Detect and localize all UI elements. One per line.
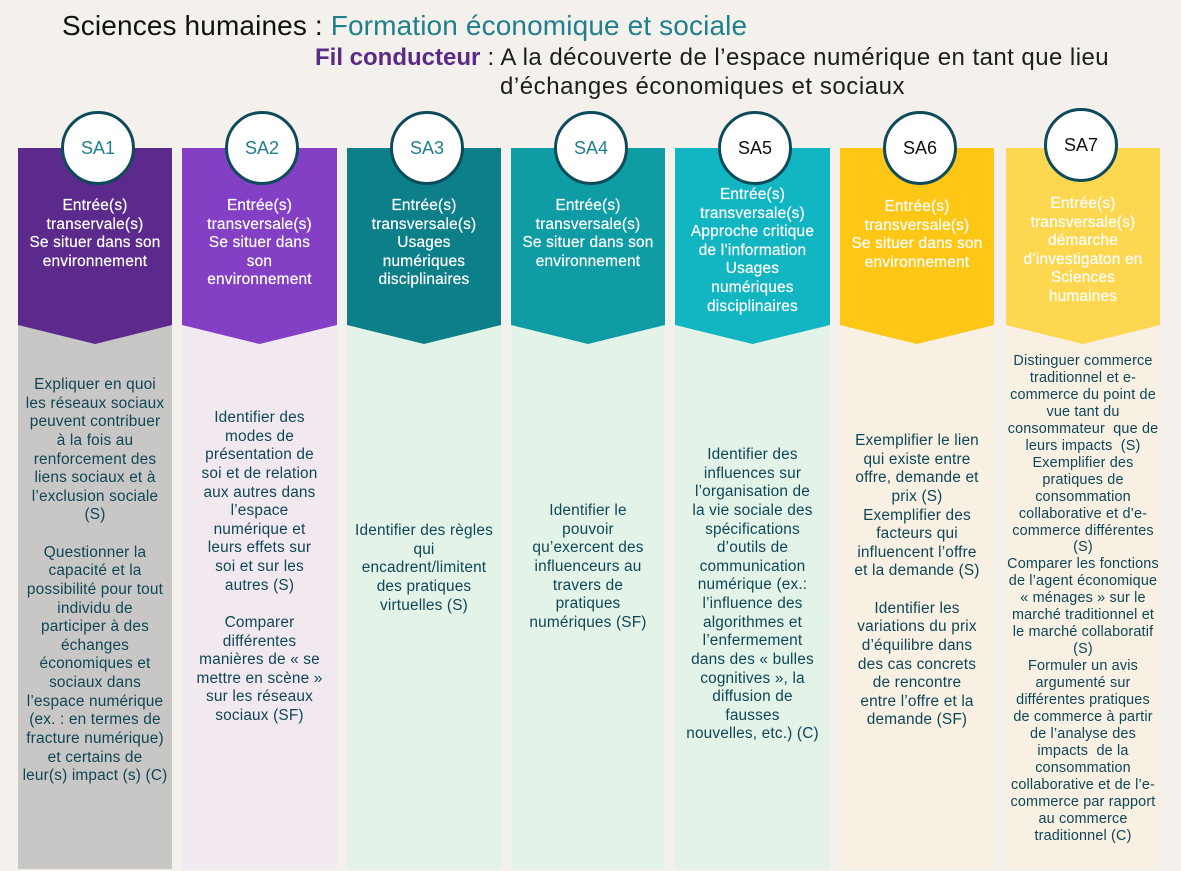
SA2 body background (182, 325, 337, 869)
SA3 body background (347, 325, 501, 869)
SA1 header text (29, 197, 161, 270)
SA7 body text: marché traditionnel et (1012, 607, 1154, 623)
SA2 body text: l’espace (231, 502, 288, 519)
subtitle: fil conducteur: Fil conducteur : A la découverte de l’espace numérique en tant que lieu (315, 44, 1109, 71)
SA7 body text: collaborative et de l’e- (1011, 777, 1155, 793)
SA1 body text: capacité et la (48, 562, 142, 579)
SA4 badge (554, 111, 628, 185)
SA4 header text: transversale(s) (536, 216, 640, 233)
SA3 body text: encadrent/limitent (362, 559, 486, 576)
SA7 body text: Comparer les fonctions (1007, 556, 1159, 572)
SA2 header text: son (247, 253, 272, 270)
SA3 header text (372, 197, 476, 288)
SA1 body text (23, 376, 167, 784)
panel: SA3 (347, 111, 501, 869)
SA1 body text: à la fois au (57, 432, 133, 449)
SA1 body text: renforcement des (34, 450, 156, 468)
SA6 body text: facteurs qui (876, 525, 958, 542)
SA1 body text: peuvent contribuer (30, 413, 160, 430)
SA6 badge: SA6 (903, 138, 937, 158)
SA4 header text (522, 197, 654, 270)
SA4 header banner (511, 148, 665, 344)
SA4 badge: SA4 (574, 138, 608, 158)
SA2 header text: Se situer dans (209, 234, 310, 251)
SA7 body text: (S) (1073, 641, 1093, 657)
SA6 header text: Entrée(s) (884, 198, 950, 215)
SA5 body text: l’organisation de (695, 483, 810, 500)
SA5 header text: Usages (726, 260, 779, 277)
SA7 header banner (1006, 148, 1160, 344)
SA5 body text: fausses (725, 707, 780, 724)
SA5 badge: SA5 (738, 138, 772, 158)
SA6 body text: et la demande (S) (854, 562, 980, 579)
SA5 body text: diffusion de (712, 688, 793, 705)
SA3 body text (355, 522, 493, 614)
SA5 body text: algorithmes et (703, 614, 802, 631)
SA7 body text: Exemplifier des (1033, 455, 1133, 471)
SA2 body text: aux autres dans (203, 484, 316, 500)
SA5 body background (675, 325, 830, 869)
SA7 header text: Entrée(s) (1050, 195, 1116, 212)
SA3 body text: des pratiques (377, 578, 471, 595)
SA6 body text: demande (SF) (867, 711, 967, 728)
SA6 body text: Exemplifier des (863, 506, 971, 524)
SA2 body text: mettre en scène » (196, 670, 323, 687)
SA6 header text (851, 198, 983, 271)
SA4 body text: travers de (553, 576, 623, 594)
SA1 body text: et certains de (48, 748, 142, 766)
panel: SA6 (840, 111, 994, 869)
SA4 header text: environnement (536, 253, 640, 270)
SA1 body text: liens sociaux et à (34, 469, 156, 486)
SA3 header banner (347, 148, 501, 344)
SA3 badge: SA3 (410, 138, 444, 158)
SA7 body background (1006, 325, 1160, 869)
SA5 body text: spécifications (705, 520, 800, 538)
SA4 body text: numériques (SF) (529, 614, 647, 631)
SA7 body text: impacts de la (1037, 743, 1129, 759)
SA2 body text (196, 409, 323, 724)
SA7 body text: traditionnel (C) (1034, 828, 1132, 844)
SA5 body text: communication (700, 558, 805, 575)
SA6 body text: entre l’offre et la (860, 693, 974, 710)
SA2 body text: sur les réseaux (206, 688, 313, 705)
SA1 badge: SA1 (81, 138, 115, 158)
SA1 body text: échanges (61, 637, 129, 654)
SA7 header text: démarche (1048, 232, 1118, 249)
SA6 body text: des cas concrets (858, 656, 976, 672)
SA1 body text: sociaux dans (49, 674, 141, 691)
SA7 body text: commerce du point de (1010, 387, 1156, 403)
SA7 body text: pratiques de (1042, 472, 1124, 488)
SA5 header text: Approche critique (691, 223, 814, 240)
SA3 header text: Usages (397, 234, 451, 251)
SA1 body text: participer à des (41, 618, 149, 635)
SA7 body text: de l’analyse des (1030, 726, 1136, 742)
panel: SA4 (511, 111, 665, 869)
SA7 body text: au commerce (1038, 811, 1128, 827)
SA5 header text: Entrée(s) (720, 186, 785, 203)
SA7 body text: consommateur que de (1008, 421, 1158, 437)
SA1 header text: environnement (43, 253, 147, 270)
SA2 header text (207, 197, 312, 288)
SA2 header text: environnement (207, 271, 312, 288)
SA1 body text: (ex. : en termes de (29, 711, 161, 728)
SA6 body text: de rencontre (873, 674, 961, 691)
SA7 body text: traditionnel et e- (1030, 370, 1136, 386)
SA1 body text: fracture numérique) (26, 730, 164, 747)
SA1 body text: leur(s) impact (s) (C) (23, 767, 167, 784)
SA7 body text: de l’agent économique (1009, 573, 1157, 589)
SA1 badge (61, 111, 135, 185)
panel: SA1 (18, 111, 172, 869)
SA1 body text: (S) (84, 506, 106, 523)
SA1 header text: transervale(s) (47, 216, 143, 233)
SA5 body text: l’enfermement (703, 632, 802, 649)
SA6 body text (854, 432, 980, 728)
SA1 header text: Entrée(s) (62, 197, 128, 214)
SA2 badge: SA2 (245, 138, 279, 158)
SA1 body text: Questionner la (44, 544, 146, 561)
SA5 header text: de l’information (699, 242, 806, 259)
SA6 body text: Identifier les (874, 600, 960, 617)
SA2 body text: présentation de (205, 446, 314, 463)
SA4 body text: qu’exercent des (532, 539, 644, 556)
SA7 body text: différentes pratiques (1016, 692, 1150, 708)
SA1 header text: Se situer dans son (29, 234, 161, 251)
SA6 header banner (840, 148, 994, 344)
SA1 body text: individu de (57, 600, 133, 616)
panel: SA7 (1006, 108, 1160, 869)
SA3 badge (390, 111, 464, 185)
SA7 body text: Formuler un avis (1028, 658, 1138, 674)
SA1 body text: Expliquer en quoi (34, 376, 156, 393)
panel: SA5 (675, 111, 830, 869)
SA1 body background (18, 325, 172, 869)
SA2 body text: différentes (223, 632, 296, 650)
SA5 body text: nouvelles, etc.) (C) (686, 725, 819, 742)
SA7 header text: d’investigaton en (1024, 251, 1142, 268)
SA7 body text (1007, 353, 1159, 844)
SA2 body text: soi et de relation (202, 465, 318, 482)
SA2 body text: modes de (225, 428, 294, 445)
SA7 badge (1044, 108, 1118, 182)
SA7 header text: Sciences (1051, 269, 1115, 286)
SA7 header text: transversale(s) (1031, 214, 1135, 231)
SA1 body text: l’espace numérique (27, 693, 163, 710)
SA1 body text: les réseaux sociaux (26, 395, 164, 412)
SA5 header text: numériques (711, 279, 794, 296)
SA4 header text: Se situer dans son (522, 234, 654, 251)
SA1 header banner (18, 148, 172, 344)
SA7 body text: commerce par rapport (1011, 794, 1155, 810)
SA5 body text: dans des « bulles (691, 651, 814, 668)
SA2 body text: manières de « se (199, 651, 320, 668)
SA7 body text: collaborative et d’e- (1019, 506, 1147, 522)
SA4 header text: Entrée(s) (555, 197, 621, 214)
SA2 body text: numérique et (214, 521, 305, 538)
SA5 body text: cognitives », la (700, 670, 805, 686)
SA6 body text: influencent l’offre (857, 544, 977, 561)
SA1 body text: possibilité pour tout (27, 581, 163, 598)
SA7 body text: consommation (1035, 489, 1131, 505)
SA2 body text: sociaux (SF) (215, 707, 304, 724)
SA3 body text: qui (413, 541, 435, 558)
SA3 header text: transversale(s) (372, 216, 476, 233)
SA1 body text: économiques et (39, 655, 151, 672)
SA7 body text: leurs impacts (S) (1025, 438, 1140, 454)
SA5 body text: l’influence des (702, 595, 803, 612)
SA5 body text: Identifier des (707, 446, 798, 463)
SA6 body text: prix (S) (892, 488, 942, 505)
SA4 body text: influenceurs au (535, 558, 641, 575)
SA7 body text: (S) (1073, 539, 1093, 555)
SA3 header text: numériques (383, 253, 465, 270)
SA7 badge: SA7 (1064, 135, 1098, 155)
subtitle: fil conducteur: d’échanges économiques et sociaux (500, 73, 905, 100)
SA5 body text: influences sur (704, 465, 801, 482)
SA7 body text: commerce différentes (1012, 523, 1154, 539)
SA6 badge (883, 111, 957, 185)
SA2 body text: Identifier des (214, 409, 305, 426)
SA2 body text: Comparer (225, 614, 294, 631)
SA1 body text: l’exclusion sociale (32, 488, 158, 505)
SA7 body text: vue tant du (1046, 404, 1120, 420)
SA5 body text: la vie sociale des (692, 502, 813, 519)
SA4 body background (511, 325, 665, 869)
SA3 header text: Entrée(s) (391, 197, 457, 214)
SA6 body text: d’équilibre dans (862, 637, 972, 654)
SA4 body text (529, 502, 647, 631)
SA6 header text: environnement (865, 254, 969, 271)
SA4 body text: pratiques (556, 595, 620, 612)
SA2 body text: leurs effets sur (208, 539, 311, 556)
SA4 body text: Identifier le (549, 502, 627, 519)
SA3 body text: Identifier des règles (355, 522, 493, 539)
SA7 body text: consommation (1035, 760, 1131, 776)
SA6 body text: Exemplifier le lien (855, 432, 979, 449)
SA6 header text: Se situer dans son (851, 235, 983, 252)
SA5 header text: transversale(s) (700, 205, 805, 222)
SA2 body text: soi et sur les (215, 558, 304, 575)
SA3 body text: virtuelles (S) (380, 596, 468, 614)
SA4 body text: pouvoir (562, 521, 614, 538)
SA7 body text: le marché collaboratif (1013, 624, 1153, 640)
SA2 header banner (182, 148, 337, 344)
SA5 body text (686, 446, 819, 742)
SA6 body text: offre, demande et (855, 469, 979, 486)
SA7 header text (1024, 195, 1142, 305)
SA5 header text (690, 186, 814, 315)
SA2 body text: autres (S) (225, 577, 294, 594)
SA7 header text: humaines (1049, 288, 1117, 305)
panel: SA2 (182, 111, 337, 724)
SA7 body text: argumenté sur (1036, 675, 1130, 691)
subtitle: fil conducteur (315, 44, 1109, 100)
SA3 header text: disciplinaires (379, 271, 469, 288)
SA5 badge (718, 111, 792, 185)
title: Sciences humaines : Formation économique et sociale (62, 10, 747, 41)
SA6 body text: variations du prix (857, 618, 977, 635)
SA5 body text: numérique (ex.: (698, 576, 807, 593)
SA2 header text: transversale(s) (207, 216, 312, 233)
SA2 header text: Entrée(s) (227, 197, 292, 214)
SA5 body text: d’outils de (717, 539, 788, 556)
SA6 body background (840, 325, 994, 869)
SA2 badge (225, 111, 299, 185)
SA5 header banner (675, 148, 830, 344)
SA7 body text: Distinguer commerce (1013, 353, 1153, 369)
SA6 header text: transversale(s) (865, 217, 969, 234)
SA7 body text: de commerce à partir (1013, 709, 1153, 725)
SA7 body text: « ménages » sur le (1020, 590, 1146, 606)
SA6 body text: qui existe entre (863, 451, 971, 468)
SA5 header text: disciplinaires (707, 298, 798, 315)
